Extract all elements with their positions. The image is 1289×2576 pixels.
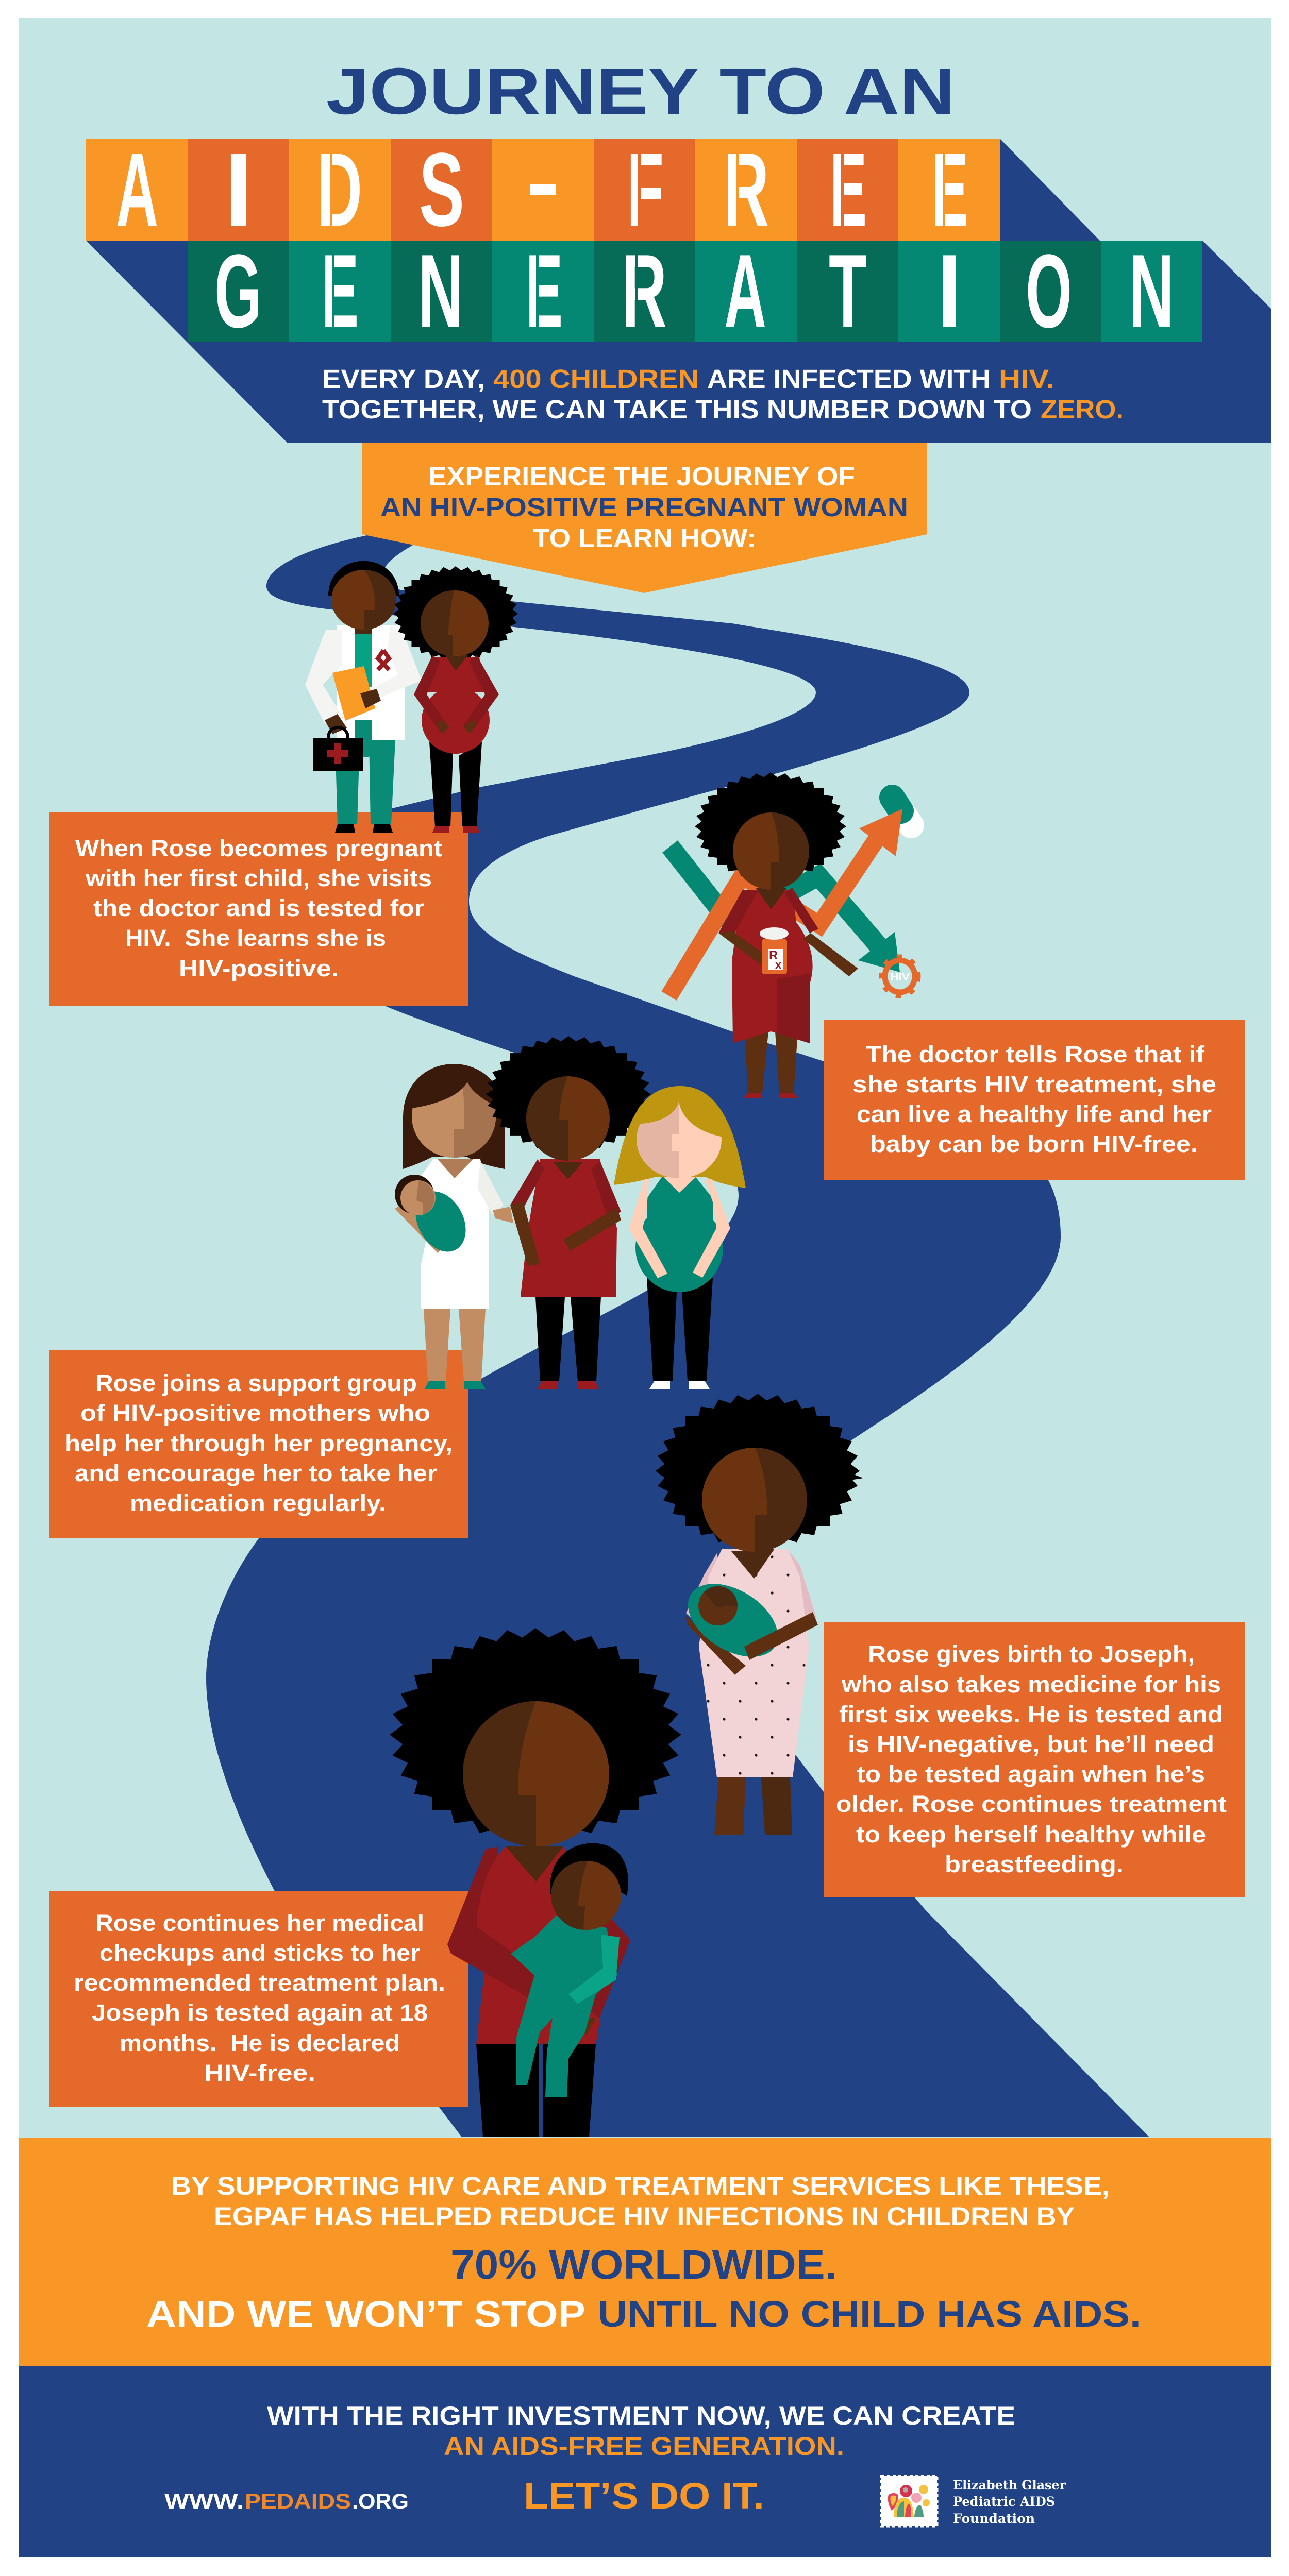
HIV gear xyxy=(881,957,918,996)
step 1 text box: the doctor and is tested for xyxy=(93,895,424,921)
head xyxy=(733,812,809,890)
figure: Rose with toddler Joseph xyxy=(390,1628,681,2137)
step 1 text box xyxy=(49,812,468,1006)
pill bottle xyxy=(760,927,789,974)
figure: Rose with medicine xyxy=(695,772,858,1098)
statistic text: EVERY DAY, xyxy=(322,364,485,394)
navy call to action band: AN AIDS-FREE GENERATION. xyxy=(444,2432,844,2461)
step 2 text box: can live a healthy life and her xyxy=(857,1101,1212,1127)
statistic text xyxy=(322,364,1124,424)
title row: GENERATION: I xyxy=(937,233,962,350)
medical bag xyxy=(313,727,363,771)
navy call to action band: WITH THE RIGHT INVESTMENT NOW, WE CAN CREATE xyxy=(267,2401,1015,2430)
HIV gear: HIV xyxy=(890,971,910,983)
let's do it: LET’S DO IT. xyxy=(524,2476,764,2517)
website: WWW. xyxy=(164,2489,244,2513)
foundation name: Elizabeth Glaser xyxy=(953,2478,1066,2493)
foundation name: Foundation xyxy=(953,2511,1035,2526)
title row: GENERATION: E xyxy=(322,233,359,350)
title row: GENERATION: T xyxy=(829,233,867,350)
title row: GENERATION: N xyxy=(1129,233,1174,350)
orange impact band: 70% WORLDWIDE. xyxy=(450,2242,837,2287)
step 1 text box: HIV. She learns she is xyxy=(125,925,386,951)
step 5 text box: Rose continues her medical xyxy=(95,1910,424,1936)
figure: Rose with newborn xyxy=(656,1394,863,1835)
statistic text: ARE INFECTED WITH xyxy=(707,364,991,394)
step 4 text box: to keep herself healthy while xyxy=(856,1821,1206,1848)
orange impact band xyxy=(19,2138,1271,2366)
website: PEDAIDS xyxy=(245,2489,351,2513)
step 4 text box: breastfeeding. xyxy=(945,1851,1124,1877)
step 3 text box: Rose joins a support group xyxy=(95,1370,417,1396)
step 3 text box: of HIV-positive mothers who xyxy=(80,1400,430,1426)
title row: AIDS-FREE: S xyxy=(419,131,464,248)
step 4 text box: older. Rose continues treatment xyxy=(836,1791,1227,1817)
website xyxy=(164,2489,409,2513)
title row: AIDS-FREE: E xyxy=(830,131,867,248)
title row: GENERATION: A xyxy=(724,233,766,350)
statistic text: HIV. xyxy=(999,364,1054,394)
step 5 text box: recommended treatment plan. xyxy=(74,1970,445,1996)
orange pentagon banner: AN HIV-POSITIVE PREGNANT WOMAN xyxy=(380,493,908,522)
step 5 text box: months. He is declared xyxy=(120,2030,400,2056)
step 4 text box: to be tested again when he’s xyxy=(857,1761,1205,1787)
figure: Rose in support group xyxy=(486,1036,651,1389)
statistic text: ZERO. xyxy=(1041,395,1124,424)
step 2 text box xyxy=(824,1020,1245,1180)
title row: AIDS-FREE: R xyxy=(724,131,769,248)
statistic text: TOGETHER, WE CAN TAKE THIS NUMBER DOWN TO xyxy=(322,395,1032,424)
step 3 text box xyxy=(49,1350,468,1538)
title row: AIDS-FREE: E xyxy=(931,131,968,248)
head xyxy=(635,1094,724,1178)
step 1 text box: When Rose becomes pregnant xyxy=(75,835,442,861)
logo stamp xyxy=(881,2476,937,2526)
step 5 text box: checkups and sticks to her xyxy=(99,1940,420,1966)
orange pentagon banner: TO LEARN HOW: xyxy=(533,523,756,553)
step 4 text box: who also takes medicine for his xyxy=(841,1671,1221,1698)
doctor head xyxy=(331,570,396,630)
step 2 text box: baby can be born HIV-free. xyxy=(870,1131,1198,1157)
figure: doctor xyxy=(305,561,422,833)
title row: AIDS-FREE: F xyxy=(627,131,664,248)
figure: pregnant Rose xyxy=(393,566,518,833)
orange impact band: EGPAF HAS HELPED REDUCE HIV INFECTIONS IN CHILDREN BY xyxy=(214,2202,1075,2231)
pill bottle: R xyxy=(769,948,778,962)
step 5 text box: Joseph is tested again at 18 xyxy=(92,1999,428,2026)
title row: AIDS-FREE xyxy=(86,131,1000,248)
head xyxy=(421,590,489,656)
step 1 text box: with her first child, she visits xyxy=(85,865,432,891)
title row: GENERATION: G xyxy=(214,233,262,350)
step 3 text box: and encourage her to take her xyxy=(75,1460,437,1486)
step 4 text box: is HIV-negative, but he’ll need xyxy=(848,1731,1214,1757)
head xyxy=(526,1076,610,1161)
step 4 text box: Rose gives birth to Joseph, xyxy=(868,1641,1195,1667)
title row: AIDS-FREE: I xyxy=(224,131,254,248)
pill bottle: x xyxy=(775,958,782,971)
title row: AIDS-FREE: D xyxy=(317,131,362,248)
title: journey to an: JOURNEY TO AN xyxy=(326,55,955,128)
statistic text: 400 CHILDREN xyxy=(493,364,699,394)
step 2 text box: The doctor tells Rose that if xyxy=(866,1041,1205,1067)
title row: AIDS-FREE: A xyxy=(116,131,158,248)
navy call to action band xyxy=(19,2366,1271,2557)
orange impact band: BY SUPPORTING HIV CARE AND TREATMENT SERVICES LIKE THESE, xyxy=(171,2172,1110,2200)
figure: blonde woman xyxy=(614,1086,746,1389)
step 3 text box: help her through her pregnancy, xyxy=(65,1430,453,1456)
step 4 text box: first six weeks. He is tested and xyxy=(839,1701,1223,1727)
ribbon icon xyxy=(378,650,389,670)
title row: GENERATION: E xyxy=(526,233,563,350)
orange pentagon banner: EXPERIENCE THE JOURNEY OF xyxy=(428,462,855,491)
step 5 text box: HIV-free. xyxy=(204,2060,315,2086)
head xyxy=(412,1073,497,1158)
arrows and pill xyxy=(669,798,918,996)
navy header ribbon xyxy=(86,139,1271,443)
step 2 text box: she starts HIV treatment, she xyxy=(852,1071,1216,1097)
capsule xyxy=(892,798,911,825)
step 5 text box xyxy=(49,1891,468,2107)
foundation name: Pediatric AIDS xyxy=(953,2494,1055,2509)
website: .ORG xyxy=(352,2489,409,2513)
foundation name xyxy=(953,2478,1066,2526)
baby in blanket xyxy=(395,1175,476,1260)
newborn in blanket xyxy=(675,1569,818,1675)
orange impact band: AND WE WON’T STOP xyxy=(146,2294,585,2335)
step 1 text box: HIV-positive. xyxy=(179,955,339,981)
toddler Joseph xyxy=(511,1843,628,2097)
orange pentagon banner xyxy=(362,443,927,593)
head xyxy=(702,1448,807,1552)
clipboard xyxy=(332,666,375,721)
head xyxy=(463,1701,609,1846)
step 3 text box: medication regularly. xyxy=(130,1490,386,1516)
orange impact band: UNTIL NO CHILD HAS AIDS. xyxy=(598,2294,1141,2335)
figure: woman with baby xyxy=(395,1064,513,1389)
title row: GENERATION xyxy=(188,233,1202,350)
step 4 text box xyxy=(824,1622,1245,1897)
winding road xyxy=(206,531,1149,2137)
title row: GENERATION: R xyxy=(622,233,667,350)
title row: GENERATION: O xyxy=(1026,233,1072,350)
title row: GENERATION: N xyxy=(418,233,463,350)
